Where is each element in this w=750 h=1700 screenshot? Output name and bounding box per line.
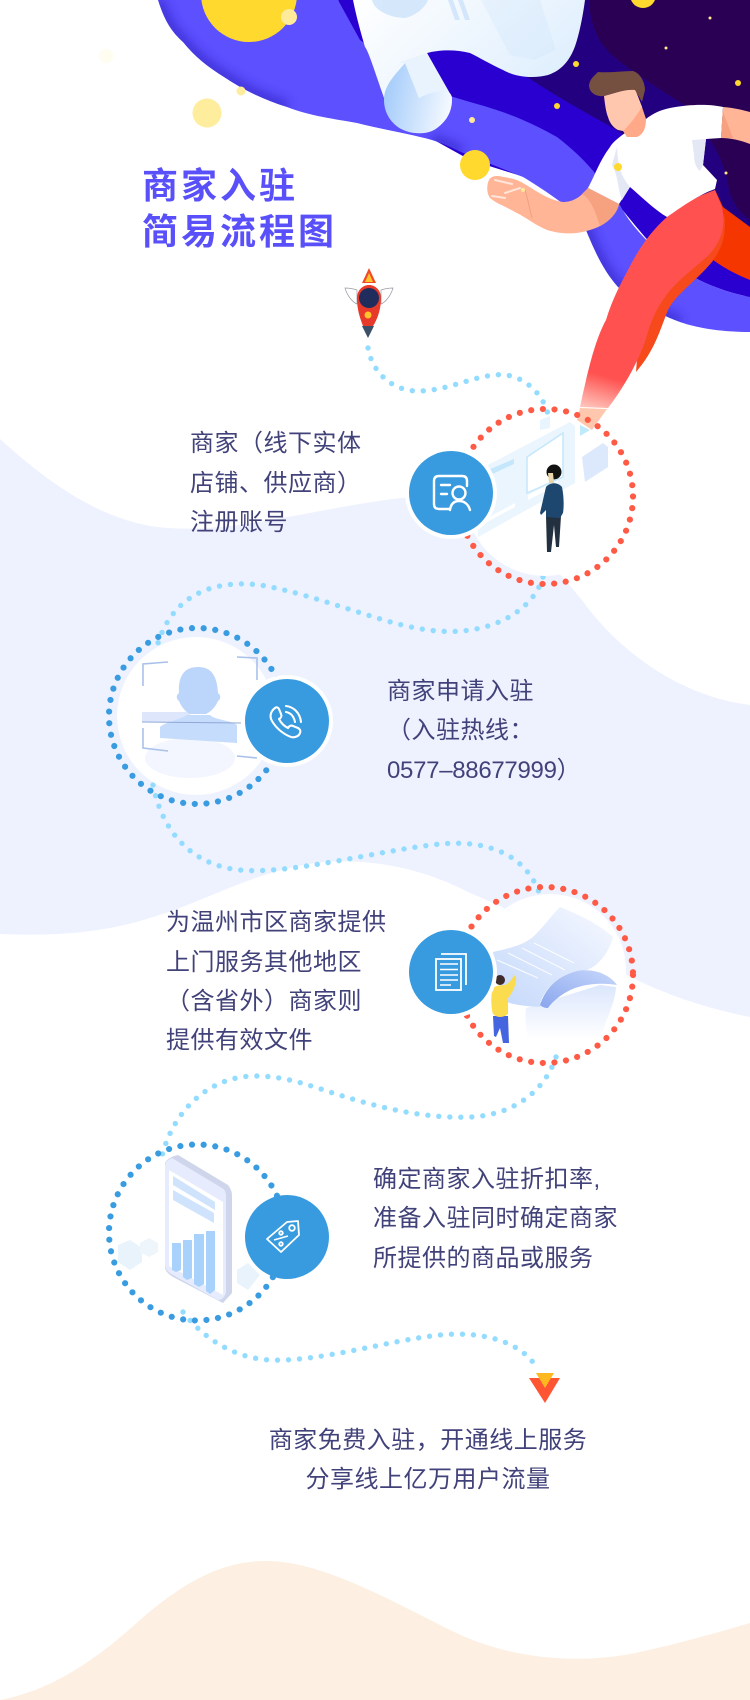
dotted ring bbox=[109, 1144, 285, 1320]
disc bbox=[117, 637, 275, 795]
man: forearm shadow and fingers bbox=[492, 180, 619, 226]
icon badge: account bbox=[405, 447, 497, 539]
step 4 text: 准备入驻同时确定商家 bbox=[373, 1205, 618, 1232]
person in yellow bbox=[491, 975, 516, 1043]
step 3: documents bbox=[405, 887, 633, 1063]
person bbox=[540, 464, 564, 552]
scroll illustration bbox=[493, 907, 617, 1040]
final step text: 商家免费入驻，开通线上服务 bbox=[269, 1427, 587, 1454]
step 2: hotline bbox=[109, 628, 333, 804]
isometric screens bbox=[478, 416, 608, 537]
title: 简易流程图 bbox=[142, 211, 337, 252]
paper roll: curl bbox=[384, 63, 452, 133]
dotted ring bbox=[109, 628, 285, 804]
hero illustration: flowing waves and running man bbox=[99, 0, 750, 430]
paper roll: upper curl strip bbox=[398, 53, 448, 98]
man: raised arm bbox=[721, 107, 750, 144]
icon badge: price tag bbox=[245, 1195, 329, 1279]
icon badge: phone bbox=[241, 675, 333, 767]
final step text bbox=[269, 1427, 587, 1493]
step 4 text: 所提供的商品或服务 bbox=[373, 1245, 594, 1272]
step 3 text: 为温州市区商家提供 bbox=[166, 909, 386, 936]
step 4: discount bbox=[109, 1144, 329, 1320]
step 4 text: 确定商家入驻折扣率, bbox=[373, 1166, 601, 1193]
dotted route segments bbox=[153, 348, 556, 1368]
wave: violet ribbon bbox=[158, 0, 750, 332]
paper roll: document sheet bbox=[353, 0, 585, 133]
yellow planets bbox=[99, 0, 741, 180]
man: leg shading bbox=[636, 213, 725, 372]
man: hair bbox=[589, 71, 645, 102]
man: face bbox=[604, 89, 642, 131]
man: back leg bbox=[708, 190, 750, 280]
step 2 text: 0577–88677999） bbox=[387, 757, 580, 784]
final step text: 分享线上亿万用户流量 bbox=[306, 1466, 550, 1493]
man: front leg bbox=[580, 190, 723, 408]
dotted ring bbox=[458, 409, 633, 584]
dotted ring bbox=[457, 887, 633, 1063]
wave: violet ribbon edge shading bbox=[158, 0, 680, 322]
paper roll: printed marks bbox=[372, 0, 556, 60]
step 3 text: （含省外）商家则 bbox=[166, 988, 362, 1015]
step 1 text: 店铺、供应商） bbox=[190, 470, 362, 497]
man: neck bbox=[623, 89, 646, 137]
step 3 text: 上门服务其他地区 bbox=[166, 949, 362, 976]
disc bbox=[474, 894, 626, 1046]
man: foot bbox=[577, 408, 607, 430]
step 1 text bbox=[190, 430, 362, 536]
wave: royal blue layer bbox=[338, 0, 750, 297]
background shape: pale blue wave bbox=[0, 439, 750, 1017]
background shape: peach wave at bottom bbox=[0, 1561, 750, 1700]
step 2 text bbox=[387, 678, 580, 784]
step 1 text: 商家（线下实体 bbox=[190, 430, 362, 457]
step 2 text: 商家申请入驻 bbox=[387, 678, 534, 705]
man: reaching arm bbox=[487, 176, 619, 233]
step 3 text bbox=[166, 909, 386, 1054]
wave: deep purple night sky with stars bbox=[589, 0, 750, 220]
wave: darkest indigo layer bbox=[520, 0, 750, 300]
arrow: route end marker bbox=[529, 1373, 560, 1403]
icon badge: files bbox=[405, 926, 497, 1018]
title bbox=[142, 165, 337, 252]
title: 商家入驻 bbox=[142, 165, 298, 206]
man: shirt shadow bbox=[612, 139, 706, 200]
step 1 text: 注册账号 bbox=[190, 509, 288, 536]
man: shirt bbox=[588, 105, 723, 217]
disc bbox=[465, 416, 625, 576]
step 2 text: （入驻热线： bbox=[387, 717, 534, 744]
phone chart illustration bbox=[118, 1155, 260, 1303]
step 4 text bbox=[373, 1166, 618, 1272]
face scan illustration bbox=[142, 657, 257, 778]
step 1: register account bbox=[405, 409, 633, 584]
icon: rocket bbox=[345, 268, 393, 338]
step 3 text: 提供有效文件 bbox=[166, 1027, 313, 1054]
